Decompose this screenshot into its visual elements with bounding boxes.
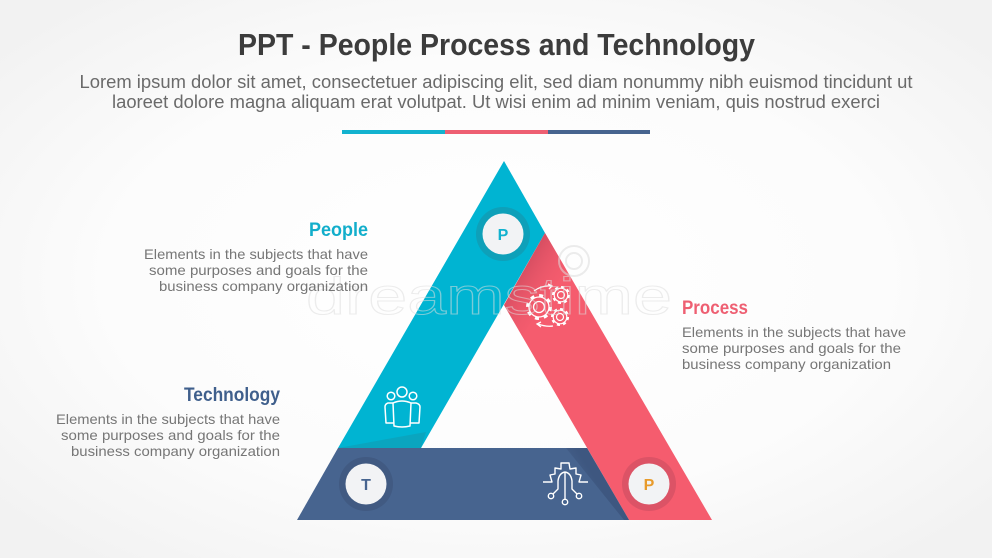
badge: people P: [476, 207, 530, 261]
triangle diagram: [297, 161, 712, 520]
tri-colour divider: [342, 130, 650, 134]
label: people: People: [309, 220, 368, 241]
segment: process (red): [504, 233, 712, 520]
badge: technology T: [339, 457, 393, 511]
watermark: dreamstime: [306, 268, 672, 326]
badge: technology T: T: [361, 477, 371, 494]
label: people: [144, 220, 368, 294]
label: process: [682, 298, 906, 372]
watermark: [306, 246, 672, 326]
label: people: business company organization: [159, 278, 368, 294]
segment: people (blue): [338, 161, 545, 448]
label: people: Elements in the subjects that have: [144, 246, 368, 262]
shadow on navy segment: [566, 448, 629, 520]
segment: technology (navy): [297, 448, 629, 520]
subtitle text: [80, 71, 912, 112]
label: technology: business company organization: [71, 443, 280, 459]
label: technology: [56, 385, 280, 459]
badge: people P: P: [498, 227, 509, 244]
title: PPT - People Process and Technology: [238, 27, 756, 62]
label: process: some purposes and goals for the: [682, 340, 901, 356]
icon: gears: [528, 284, 569, 327]
label: technology: Elements in the subjects that have: [56, 411, 280, 427]
badge: process P: P: [644, 477, 655, 494]
icon: technology gear with circuit: [543, 463, 588, 505]
badge: process P: [622, 457, 676, 511]
label: process: business company organization: [682, 356, 891, 372]
shadow on blue segment: [338, 432, 426, 448]
label: process: Elements in the subjects that have: [682, 324, 906, 340]
label: process: Process: [682, 298, 748, 319]
label: technology: some purposes and goals for the: [61, 427, 280, 443]
shadow on red segment: [504, 233, 566, 336]
label: technology: Technology: [184, 385, 280, 406]
subtitle text: laoreet dolore magna aliquam erat volutpat. Ut wisi enim ad minim veniam, quis nostrud exerci: [112, 91, 880, 112]
subtitle text: Lorem ipsum dolor sit amet, consectetuer adipiscing elit, sed diam nonummy nibh euismod tincidunt ut: [80, 71, 912, 92]
label: people: some purposes and goals for the: [149, 262, 368, 278]
icon: people group: [385, 387, 420, 427]
